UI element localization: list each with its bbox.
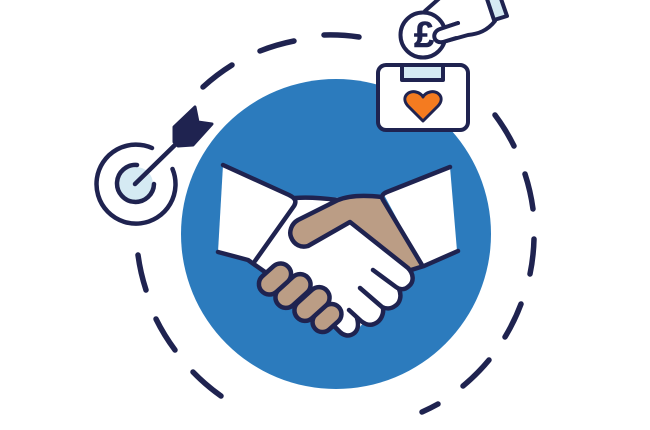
finger four: [308, 300, 346, 336]
heart: [405, 92, 441, 121]
dashed orbit ring: [138, 35, 534, 412]
left shirt cuff: [218, 165, 296, 262]
handshake illustration: [218, 165, 458, 336]
box: [378, 65, 468, 130]
target centre: [119, 167, 153, 201]
right shirt cuff: [383, 167, 457, 265]
icon: target with arrow: [97, 107, 212, 224]
blue circle background: [181, 79, 491, 389]
target outer ring: [97, 145, 176, 224]
finger two: [271, 270, 315, 312]
coin: [400, 12, 446, 58]
icon: donation box with coin and hand: [378, 0, 507, 130]
target inner ring: [117, 165, 154, 202]
box slot flap: [402, 65, 443, 80]
arrow shaft: [135, 143, 177, 184]
finger over coin: [434, 23, 458, 42]
pound sign: £: [414, 14, 434, 55]
finger three: [290, 283, 334, 325]
hand: [425, 0, 495, 42]
tan hand: [290, 196, 422, 269]
fingers: [255, 259, 346, 336]
handshake outlines: [218, 165, 458, 335]
white hand: [252, 197, 422, 335]
finger one: [255, 259, 295, 299]
hand cuff: [486, 0, 507, 20]
arrow fletching: [174, 107, 212, 146]
